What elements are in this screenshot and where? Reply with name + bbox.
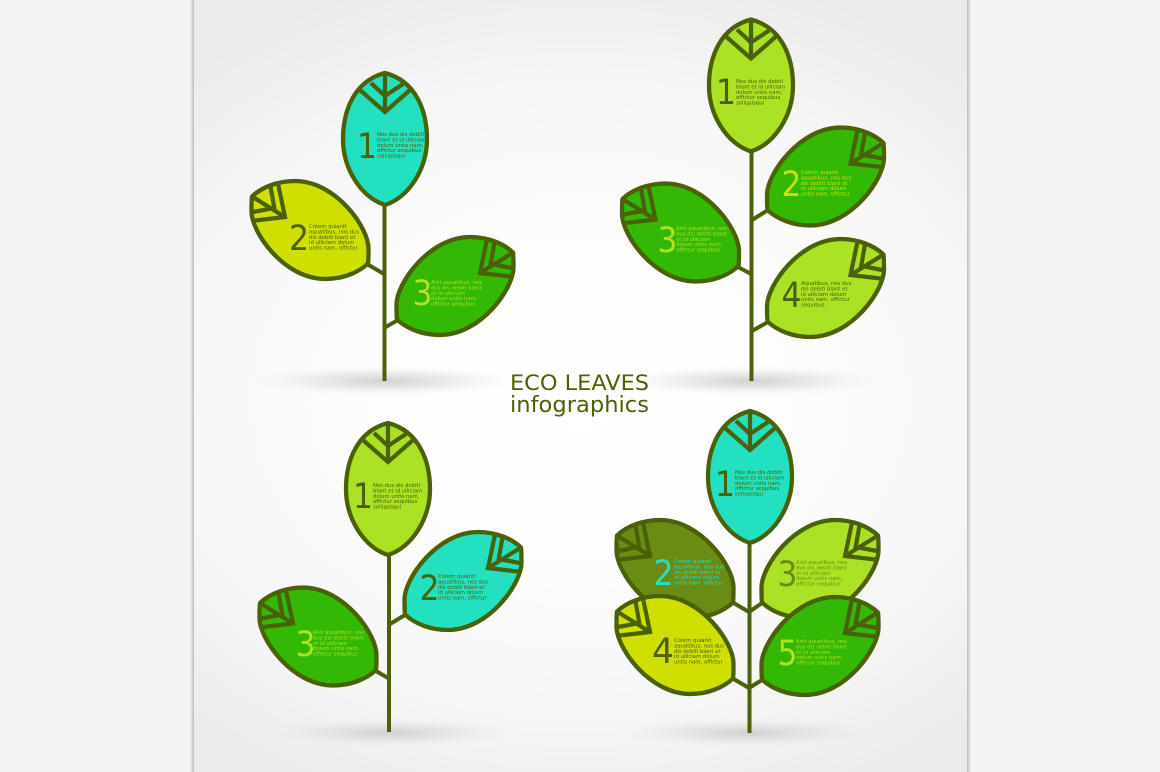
leaf 2: 2 (782, 165, 802, 205)
leaf 1: sollupisqui (736, 101, 764, 107)
leaf 2 (251, 181, 369, 279)
leaf 4: id ulliciam dolum (801, 292, 846, 298)
leaf 2: id ulliciam dolum (801, 186, 846, 192)
leaf 3: Anit aquatibus, nos (431, 280, 482, 286)
title: infographics (510, 393, 649, 418)
leaf 3: et id ulliciam (796, 571, 830, 577)
leaf 3: 3 (296, 625, 316, 665)
leaf 2: Cotem quianit (309, 224, 346, 230)
leaf 1: Nos dus dis debiti (373, 483, 420, 489)
leaf 3: dolum untis nam, (313, 646, 360, 652)
leaf 1: blant et id ulliciam (736, 84, 785, 90)
leaf 3: Anit aquatibus, nos (796, 560, 847, 566)
leaf 3: dus dis debiti blant (313, 635, 364, 641)
leaf 1: Nos dus dis debiti (736, 79, 783, 85)
leaf 1: offictur sequibus (736, 95, 780, 101)
title: ECO LEAVES (510, 371, 649, 395)
leaf 1: 1 (716, 73, 736, 113)
leaf 3 (259, 588, 377, 686)
leaf 3: dus dis debiti blant (431, 285, 482, 291)
leaf 2: untis nam, offictur (674, 581, 724, 587)
leaf 1 (346, 423, 430, 555)
leaf 5 (761, 597, 879, 695)
leaf 2: Cotem quianit (438, 574, 475, 580)
leaf 2: dis debiti blant et (801, 181, 848, 187)
leaf 2: id ulliciam dolum (674, 575, 719, 581)
leaf 5: Anit aquatibus, nos (796, 639, 847, 645)
leaf 3: dus dis debiti blant (676, 231, 727, 237)
leaf 2: untis nam, offictur (801, 192, 851, 198)
leaf 3: 3 (658, 221, 678, 261)
leaf 2 (404, 532, 522, 630)
leaf 1: sollupisqui (377, 154, 405, 160)
leaf 3: offictur sequibus (796, 582, 840, 588)
leaf 3: dolum untis nam, (796, 576, 843, 582)
leaf 4: aquatibus, nos dus (674, 643, 724, 649)
leaf 3: offictur sequibus (676, 248, 720, 254)
leaf 2: 2 (654, 554, 674, 594)
plant 1: three leaves (251, 73, 514, 396)
leaf 2: aquatibus, nos dus (801, 175, 851, 181)
leaf 4: 4 (782, 276, 802, 316)
title (510, 371, 649, 418)
leaf 4 (767, 239, 884, 337)
leaf 2: Cotem quianit (674, 559, 711, 565)
leaf 1: dolum untis nam, (736, 90, 783, 96)
leaf 2: 2 (289, 219, 309, 259)
leaf 2: dis debiti blant et (438, 585, 484, 591)
leaf 3: et id ulliciam (676, 237, 710, 243)
leaf 1: 1 (357, 127, 377, 167)
plant 4: five leaves (614, 411, 884, 748)
leaf 1: 1 (715, 465, 735, 505)
leaf 4: sequibus (801, 303, 825, 309)
leaf 2: 2 (420, 569, 440, 609)
leaf 3: et id ulliciam (431, 291, 465, 297)
leaf 3 (761, 520, 879, 618)
leaf 4: Aquatibus, nos dus (801, 281, 852, 287)
leaf 3: offictur sequibus (431, 302, 475, 308)
leaf 1: blant et id ulliciam (373, 488, 422, 494)
leaf 1: offictur sequibus (377, 148, 421, 154)
plant 2: four leaves (621, 20, 884, 396)
leaf 1: offictur sequibus (373, 499, 417, 505)
leaf 5: offictur sequibus (796, 661, 840, 667)
leaf 4: untis nam, offictur (674, 660, 724, 666)
leaf 2: id ulliciam dolum (438, 590, 483, 596)
leaf 2: dis debiti blant et (309, 235, 356, 241)
leaf 3: 3 (778, 555, 798, 595)
leaf 1: Nos dus dis debiti (377, 132, 424, 138)
leaf 5: dolum untis nam, (796, 655, 843, 661)
leaf 1: sollupisqui (735, 492, 763, 498)
leaf 1: dolum untis nam, (377, 143, 424, 149)
leaf 2: dis debiti blant et (674, 570, 720, 576)
leaf 4 (616, 596, 734, 694)
leaf 3 (396, 237, 514, 335)
leaf 1: Nos dus dis debiti (735, 470, 782, 476)
leaf 2: aquatibus, nos dus (309, 229, 359, 235)
leaf 1: 1 (353, 477, 373, 517)
leaf 2: untis nam, offictur (309, 246, 359, 252)
leaf 1: blant et id ulliciam (377, 137, 426, 143)
leaf 2: aquatibus, nos dus (438, 579, 488, 585)
leaf 1: dolum untis nam, (735, 481, 782, 487)
leaf 3: Anit aquatibus, nos (676, 226, 727, 232)
leaf 2: untis nam, offictur (438, 596, 488, 602)
leaf 2 (767, 128, 884, 226)
leaf 4: dis debiti blant et (674, 649, 720, 655)
leaf 3: dus dis debiti blant (796, 565, 847, 571)
leaf 4: 4 (652, 632, 674, 672)
leaf 2: id ulliciam dolum (309, 240, 354, 246)
leaf 1: offictur sequibus (735, 486, 779, 492)
leaf 1 (708, 411, 792, 543)
leaf 2: Cotem quianit (801, 170, 838, 176)
leaf 3: Anit aquatibus, nos (313, 630, 364, 636)
leaf 3: et id ulliciam (313, 641, 347, 647)
leaf 1 (343, 73, 427, 205)
plant 3: three leaves (259, 423, 522, 748)
leaf 2 (616, 520, 734, 618)
leaf 3: dolum untis nam, (431, 296, 478, 302)
leaf 2: aquatibus, nos dus (674, 564, 724, 570)
leaf 1: dolum untis nam, (373, 494, 420, 500)
leaf 5: dus dis debiti blant (796, 644, 847, 650)
leaf 5: et id ulliciam (796, 650, 830, 656)
leaf 4: untis nam, offictur (801, 297, 851, 303)
leaf 3: 3 (412, 274, 432, 314)
leaf 4: id ulliciam dolum (674, 654, 719, 660)
leaf 4: Cotem quianit (674, 638, 711, 644)
leaf 3: dolum untis nam, (676, 242, 723, 248)
leaf 1: sollupisqui (373, 505, 401, 511)
leaf 3: offictur sequibus (313, 652, 357, 658)
leaf 4: dis debiti blant et (801, 286, 848, 292)
leaf 1: blant et id ulliciam (735, 475, 784, 481)
leaf 5: 5 (778, 634, 798, 674)
leaf 1 (709, 20, 793, 152)
leaf 3 (622, 184, 739, 282)
